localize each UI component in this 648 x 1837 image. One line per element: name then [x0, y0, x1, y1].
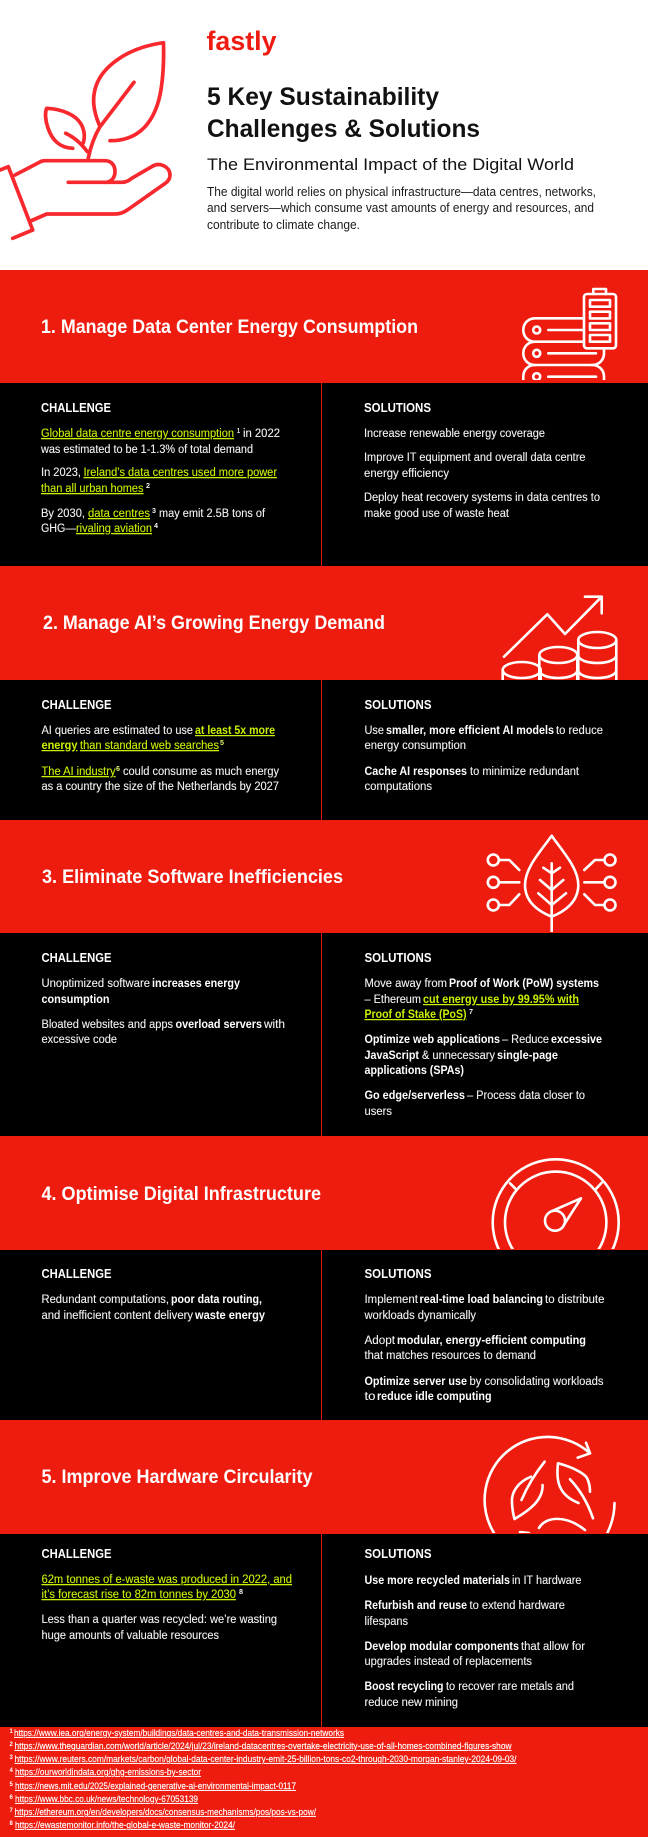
solutions text: smaller, more efficient AI models [386, 723, 554, 737]
challenge text: AI queries are estimated to use [42, 723, 193, 737]
logo: fastly: fastly [206, 26, 276, 56]
footer: source links: 4 [10, 1768, 14, 1774]
solutions text: energy efficiency [364, 466, 450, 480]
solutions text: make good use of waste heat [364, 506, 510, 520]
challenge text: with [263, 1017, 285, 1031]
solutions text: Proof of Work (PoW) systems [449, 976, 599, 990]
intro paragraph: The digital world relies on physical infrastructure—data centres, networks, [207, 185, 596, 199]
footer: source links: https://ethereum.org/en/developers/docs/consensus-mechanisms/pos/pos-vs-pow/ [14, 1807, 316, 1817]
solutions text: energy consumption [364, 738, 466, 752]
label: solutions: SOLUTIONS [364, 698, 432, 712]
challenge text: 62m tonnes of e-waste was produced in 2022, and [42, 1572, 292, 1586]
solutions text: reduce idle computing [377, 1389, 492, 1403]
section 5 [0, 1420, 648, 1727]
solutions text: reduce new mining [364, 1695, 458, 1709]
label: solutions: SOLUTIONS [364, 951, 432, 965]
challenge text: increases energy [152, 976, 240, 990]
challenge text: In 2023, [41, 465, 81, 479]
solutions text: single-page [497, 1048, 558, 1062]
heading: 5. Improve Hardware Circularity [42, 1467, 313, 1488]
challenge text: 2 [146, 483, 150, 490]
solutions text: Use more recycled materials [364, 1573, 510, 1587]
solutions text: – Reduce [502, 1032, 549, 1046]
challenge text: consumption [42, 992, 110, 1006]
challenge text: could consume as much energy [123, 764, 280, 778]
solutions text [364, 976, 602, 1118]
icon: growth arrow and coin stacks [503, 597, 616, 685]
solutions text: that allow for [521, 1639, 585, 1653]
challenge text: Less than a quarter was recycled: we’re wasting [42, 1612, 277, 1626]
footer: source links: 5 [10, 1782, 14, 1788]
subtitle: The Environmental Impact of the Digital World [207, 156, 574, 174]
solutions text: to extend hardware [470, 1598, 565, 1612]
challenge text: By 2030, [41, 506, 85, 520]
challenge text: data centres [88, 506, 150, 520]
challenge text: poor data routing, [171, 1292, 262, 1306]
footer: source links: https://www.reuters.com/markets/carbon/global-data-center-industry-emit-25-billion-tons-co2-through-2030-morgan-stanley-2024-09-03/ [14, 1754, 517, 1764]
panel: solutions [322, 680, 648, 820]
solutions text: & unnecessary [422, 1048, 496, 1062]
challenge text: GHG— [41, 521, 77, 535]
heading: 4. Optimise Digital Infrastructure [42, 1184, 321, 1205]
challenge text: waste energy [194, 1308, 265, 1322]
title: 5 Key Sustainability [207, 83, 439, 111]
challenge text: energy [42, 738, 78, 752]
challenge text: may emit 2.5B tons of [159, 506, 266, 520]
section 3 [0, 820, 648, 1136]
panel: challenge [0, 933, 321, 1136]
challenge text [42, 1572, 292, 1642]
label: challenge: CHALLENGE [41, 401, 111, 415]
challenge text: in 2022 [243, 426, 280, 440]
footer: source links: https://news.mit.edu/2025/explained-generative-ai-environmental-impact-0117 [15, 1781, 296, 1791]
intro paragraph: contribute to climate change. [207, 218, 360, 232]
panel: solutions [322, 933, 648, 1136]
challenge text: Ireland’s data centres used more power [84, 465, 277, 479]
solutions text: in IT hardware [512, 1573, 582, 1587]
intro paragraph [207, 185, 596, 232]
challenge text: 6 [116, 766, 120, 773]
footer: source links: https://www.theguardian.com/world/article/2024/jul/23/ireland-datacentres-overtake-electricity-use-of-all-homes-combined-figures-show [14, 1741, 512, 1751]
section 1 [0, 270, 648, 566]
challenge text: 3 [152, 508, 156, 515]
icon: leaf with circuit nodes [488, 836, 616, 932]
challenge text: 8 [239, 1589, 243, 1596]
solutions text: to reduce [556, 723, 603, 737]
solutions text [364, 426, 600, 520]
solutions text: Develop modular components [364, 1639, 519, 1653]
solutions text: Implement [364, 1292, 419, 1306]
solutions text: applications (SPAs) [364, 1063, 464, 1077]
solutions text: by consolidating workloads [470, 1374, 604, 1388]
challenge text: than standard web searches [80, 738, 219, 752]
challenge text: overload servers [176, 1017, 262, 1031]
challenge text: excessive code [42, 1032, 117, 1046]
solutions text: Proof of Stake (PoS) [364, 1007, 466, 1021]
footer: source links: https://ourworldindata.org/ghg-emissions-by-sector [15, 1767, 201, 1777]
footer: source links: 3 [10, 1755, 14, 1761]
challenge text: it’s forecast rise to 82m tonnes by 2030 [42, 1587, 236, 1601]
heading: 3. Eliminate Software Inefficiencies [42, 867, 343, 888]
solutions text: – Ethereum [364, 992, 421, 1006]
challenge text: Bloated websites and apps [42, 1017, 173, 1031]
panel: solutions [322, 1250, 648, 1420]
solutions text: to distribute [545, 1292, 605, 1306]
solutions text: Move away from [364, 976, 447, 990]
footer: source links: 1 [10, 1729, 14, 1735]
challenge text [42, 1292, 265, 1322]
solutions text: excessive [551, 1032, 602, 1046]
solutions text: modular, energy-efficient computing [397, 1333, 586, 1347]
challenge text: 4 [154, 523, 158, 530]
footer: source links: https://www.iea.org/energy-system/buildings/data-centres-and-data-transmission-networks [14, 1728, 344, 1738]
solutions text [364, 723, 603, 793]
solutions text: Optimize server use [364, 1374, 467, 1388]
solutions text: to recover rare metals and [446, 1679, 574, 1693]
solutions text: Go edge/serverless [364, 1088, 465, 1102]
label: challenge: CHALLENGE [42, 1547, 112, 1561]
challenge text: huge amounts of valuable resources [42, 1628, 219, 1642]
solutions text: Cache AI responses [364, 764, 467, 778]
label: solutions: SOLUTIONS [364, 1267, 432, 1281]
solutions text: Increase renewable energy coverage [364, 426, 545, 440]
footer: source links [0, 1727, 648, 1837]
solutions text: that matches resources to demand [364, 1348, 536, 1362]
icon: speedometer gauge [491, 1158, 620, 1249]
label: challenge: CHALLENGE [42, 1267, 112, 1281]
section 2 [0, 566, 648, 820]
solutions text: – Process data closer to [467, 1088, 585, 1102]
footer: source links: 8 [10, 1821, 14, 1827]
challenge text: and inefficient content delivery [42, 1308, 194, 1322]
solutions text: users [364, 1104, 392, 1118]
solutions text: JavaScript [364, 1048, 419, 1062]
footer: source links: https://www.bbc.co.uk/news/technology-67053139 [15, 1794, 198, 1804]
label: challenge: CHALLENGE [42, 698, 112, 712]
challenge text: Unoptimized software [42, 976, 150, 990]
icon: plant in hand [0, 43, 170, 238]
solutions text: real-time load balancing [420, 1292, 543, 1306]
solutions text [364, 1573, 585, 1709]
challenge text: 1 [237, 428, 240, 435]
challenge text: as a country the size of the Netherlands by 2027 [42, 779, 279, 793]
challenge text: was estimated to be 1-1.3% of total demand [40, 442, 253, 456]
solutions text: Adopt [364, 1333, 396, 1347]
challenge text: at least 5x more [195, 723, 275, 737]
solutions text: cut energy use by 99.95% with [423, 992, 579, 1006]
footer: source links: 6 [10, 1795, 14, 1801]
panel: challenge [0, 680, 321, 820]
label: solutions: SOLUTIONS [364, 401, 431, 415]
section 4 [0, 1136, 648, 1420]
challenge text [40, 426, 280, 535]
intro paragraph: and servers—which consume vast amounts of energy and resources, and [207, 201, 594, 215]
label: challenge: CHALLENGE [42, 951, 112, 965]
icon: server and battery [523, 289, 616, 390]
panel: solutions [322, 1534, 648, 1727]
header panel [0, 0, 648, 270]
footer: source links: 2 [10, 1742, 14, 1748]
solutions text: Improve IT equipment and overall data centre [364, 450, 586, 464]
panel: solutions [322, 383, 648, 566]
challenge text: Global data centre energy consumption [41, 426, 234, 440]
heading: 1. Manage Data Center Energy Consumption [41, 317, 418, 338]
solutions text: to minimize redundant [470, 764, 580, 778]
solutions text: upgrades instead of replacements [364, 1654, 532, 1668]
solutions text: to [364, 1389, 376, 1403]
solutions text: computations [364, 779, 432, 793]
panel: challenge [0, 383, 321, 566]
panel: challenge [0, 1250, 321, 1420]
challenge text: rivaling aviation [76, 521, 152, 535]
footer: source links: https://ewastemonitor.info/the-global-e-waste-monitor-2024/ [15, 1820, 235, 1830]
solutions text: Boost recycling [364, 1679, 444, 1693]
solutions text: workloads dynamically [364, 1308, 477, 1322]
heading: 2. Manage AI’s Growing Energy Demand [43, 613, 385, 634]
solutions text: 7 [469, 1009, 473, 1016]
solutions text: Use [364, 723, 384, 737]
challenge text [42, 723, 280, 793]
column dividers [321, 383, 322, 1727]
solutions text: lifespans [364, 1614, 408, 1628]
icon: recycling leaves [485, 1437, 614, 1533]
solutions text: Refurbish and reuse [364, 1598, 467, 1612]
title [207, 83, 480, 143]
label: solutions: SOLUTIONS [364, 1547, 432, 1561]
title: Challenges & Solutions [207, 115, 480, 143]
solutions text: Optimize web applications [364, 1032, 500, 1046]
solutions text [364, 1292, 605, 1403]
challenge text: Redundant computations, [42, 1292, 169, 1306]
challenge text: The AI industry [42, 764, 116, 778]
panel: challenge [0, 1534, 321, 1727]
footer: source links: 7 [10, 1808, 14, 1814]
challenge text [42, 976, 285, 1046]
solutions text: Deploy heat recovery systems in data centres to [364, 490, 600, 504]
challenge text: 5 [220, 740, 224, 747]
challenge text: than all urban homes [41, 481, 144, 495]
